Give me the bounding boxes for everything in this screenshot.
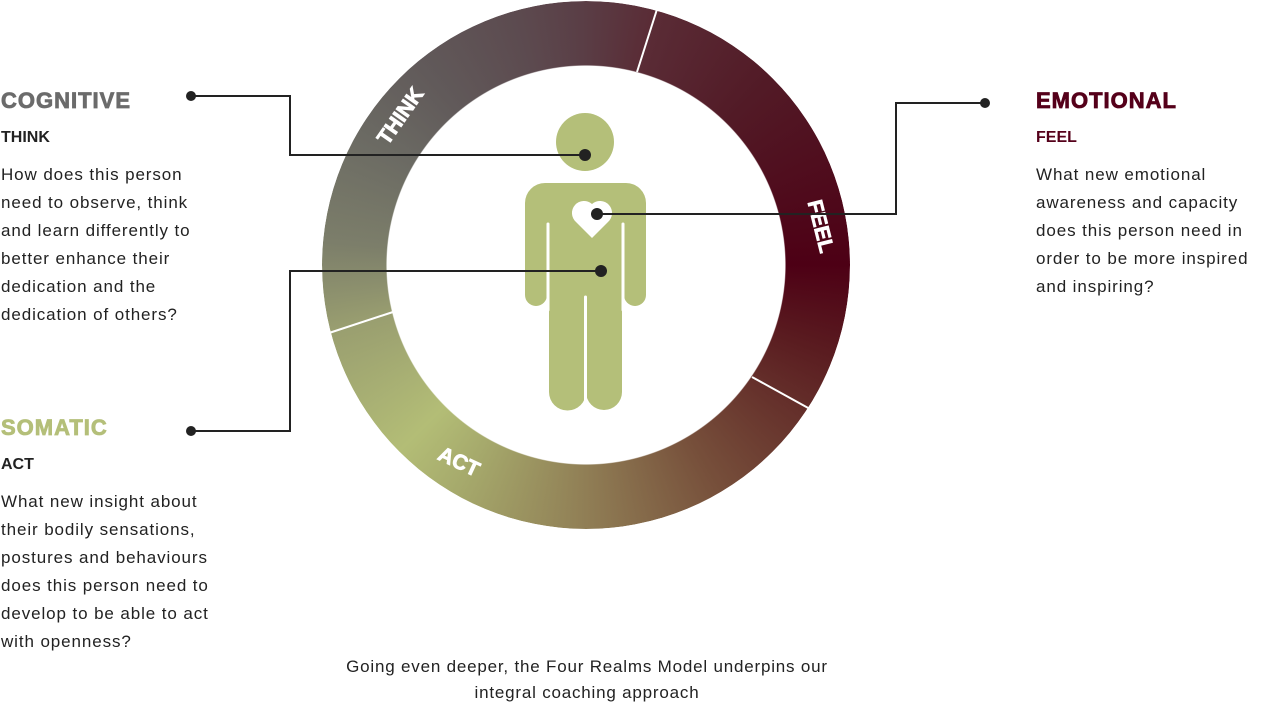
caption: integral coaching approach [475,683,699,702]
panel: emotional: FEEL [1036,129,1077,146]
panel: cognitive: THINK [1,129,50,146]
panel: cognitive: How does this person [1,165,182,184]
caption [346,657,828,702]
panel: cognitive: dedication and the [1,277,156,296]
icon: heart [572,201,612,238]
connector lines [191,96,985,431]
ring labels: THINK [373,83,428,149]
panel: somatic [1,415,209,651]
panel: emotional: and inspiring? [1036,277,1154,296]
panel: cognitive: need to observe, think [1,193,188,212]
panel: emotional: does this person need in [1036,221,1243,240]
panel: somatic: What new insight about [1,492,198,511]
panel: emotional [1036,88,1248,296]
panel: somatic: develop to be able to act [1,604,209,623]
ring chart [322,1,850,529]
panel: somatic: with openness? [1,632,132,651]
ring dividers [326,3,810,409]
ring labels: ACT [434,443,483,482]
ring labels [373,83,838,482]
panel: emotional: What new emotional [1036,165,1206,184]
panel: somatic: their bodily sensations, [1,520,196,539]
ring labels: FEEL [803,198,838,255]
panel: somatic: SOMATIC [1,415,108,440]
panel: somatic: postures and behaviours [1,548,208,567]
panel: cognitive [1,88,191,324]
panel: cognitive: dedication of others? [1,305,178,324]
panel: cognitive: and learn differently to [1,221,191,240]
panel: emotional: EMOTIONAL [1036,88,1177,113]
icon: person [525,113,646,412]
panel: somatic: does this person need to [1,576,209,595]
panel: somatic: ACT [1,456,34,473]
caption: Going even deeper, the Four Realms Model underpins our [346,657,828,676]
panel: emotional: awareness and capacity [1036,193,1238,212]
panel: emotional: order to be more inspired [1036,249,1248,268]
panel: cognitive: COGNITIVE [1,88,131,113]
panel: cognitive: better enhance their [1,249,170,268]
